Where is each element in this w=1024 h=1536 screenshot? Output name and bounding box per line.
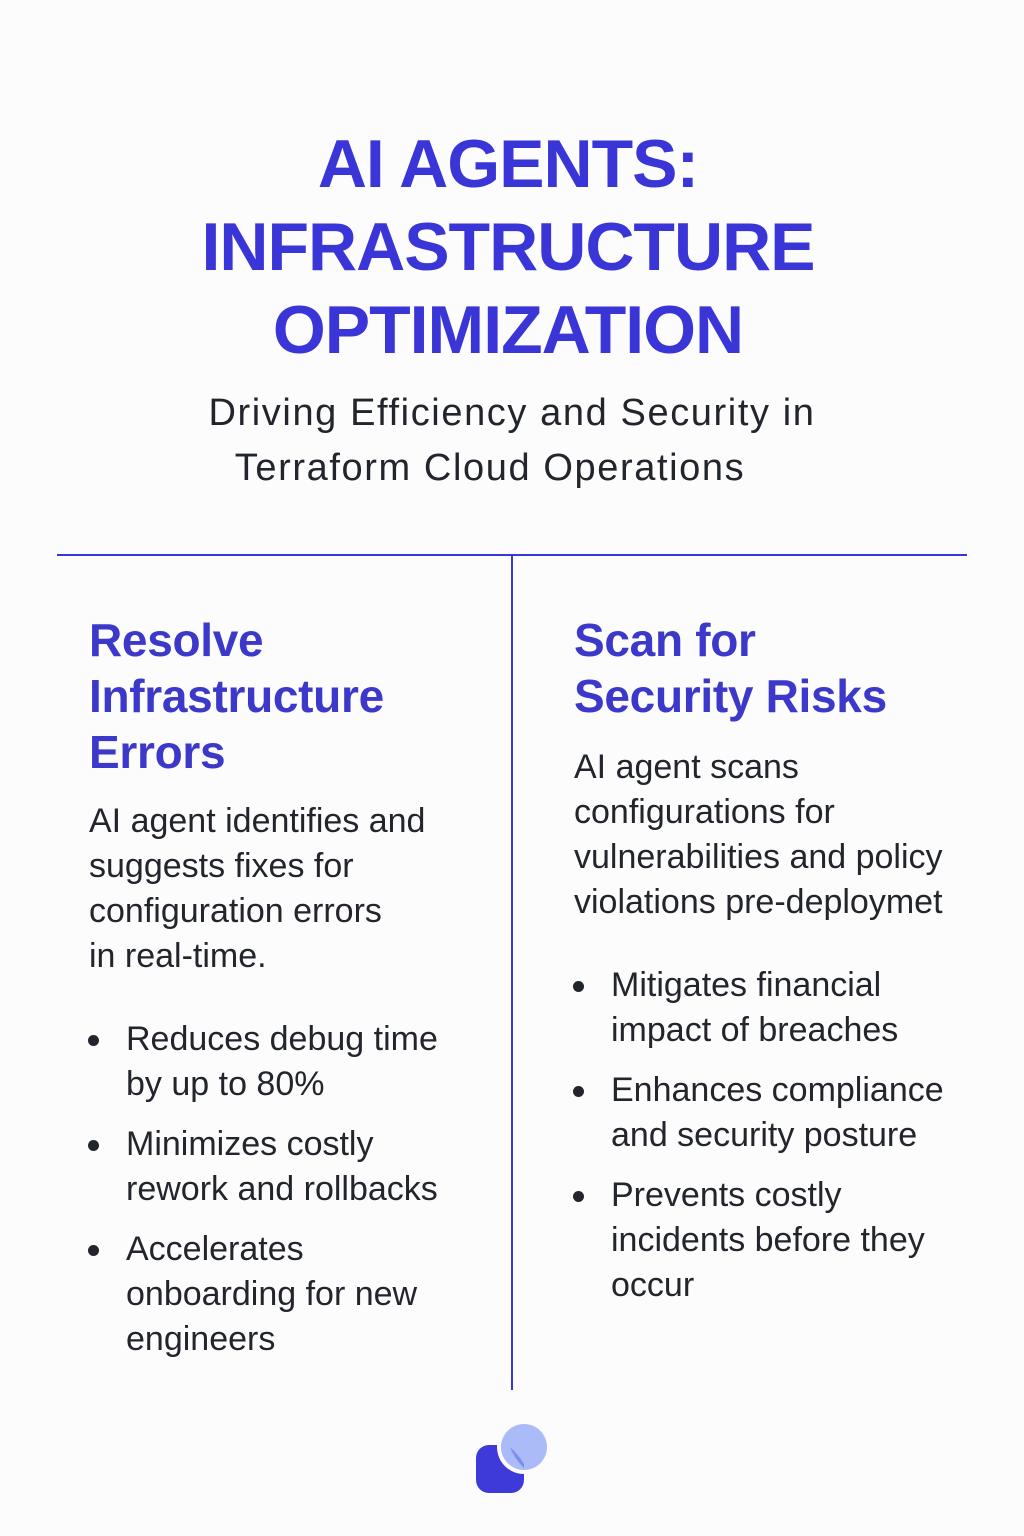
bullets: security xyxy=(573,966,944,1304)
icon: logo xyxy=(476,1424,547,1493)
bullets: security: incidents before they xyxy=(611,1221,925,1259)
subtitle: Terraform Cloud Operations xyxy=(235,447,745,489)
bullets: security: Mitigates financial xyxy=(611,966,881,1004)
heading: security: Scan for xyxy=(574,614,756,666)
text: resolve description: AI agent identifies and xyxy=(89,802,425,840)
title xyxy=(201,126,815,368)
text: resolve description: in real-time. xyxy=(89,937,267,975)
title: OPTIMIZATION xyxy=(273,292,743,368)
bullets: resolve: Accelerates xyxy=(126,1230,304,1268)
text: resolve description: suggests fixes for xyxy=(89,847,354,885)
subtitle: Driving Efficiency and Security in xyxy=(208,392,816,434)
panel: resolve errors xyxy=(88,614,438,1358)
text: security description: AI agent scans xyxy=(574,748,799,786)
text: resolve description: configuration errors xyxy=(89,892,382,930)
text: security description xyxy=(574,748,943,921)
subtitle xyxy=(208,392,816,489)
heading: security: Security Risks xyxy=(574,670,887,722)
bullets: resolve: Minimizes costly xyxy=(126,1125,373,1163)
bullets: security: occur xyxy=(611,1266,694,1304)
bullets: security: impact of breaches xyxy=(611,1011,898,1049)
text: security description: violations pre-deploymet xyxy=(574,883,943,921)
bullets: security: and security posture xyxy=(611,1116,917,1154)
heading: resolve: Errors xyxy=(89,726,225,778)
text: security description: configurations for xyxy=(574,793,835,831)
heading: resolve: Resolve xyxy=(89,614,263,666)
text: security description: vulnerabilities and policy xyxy=(574,838,943,876)
bullets: resolve: engineers xyxy=(126,1320,275,1358)
bullets: security: Prevents costly xyxy=(611,1176,842,1214)
bullets: resolve: onboarding for new xyxy=(126,1275,417,1313)
title: INFRASTRUCTURE xyxy=(201,209,815,285)
bullets: security: Enhances compliance xyxy=(611,1071,944,1109)
horizontal divider xyxy=(57,554,967,556)
heading: resolve: Infrastructure xyxy=(89,670,384,722)
panel: security risks xyxy=(573,614,944,1304)
title: AI AGENTS: xyxy=(318,126,698,202)
bullets: resolve xyxy=(88,1020,438,1358)
bullets: resolve: rework and rollbacks xyxy=(126,1170,438,1208)
bullets: resolve: by up to 80% xyxy=(126,1065,324,1103)
text: resolve description xyxy=(89,802,425,975)
vertical divider xyxy=(511,556,513,1390)
bullets: resolve: Reduces debug time xyxy=(126,1020,438,1058)
heading: security xyxy=(574,614,887,722)
heading: resolve xyxy=(89,614,384,778)
